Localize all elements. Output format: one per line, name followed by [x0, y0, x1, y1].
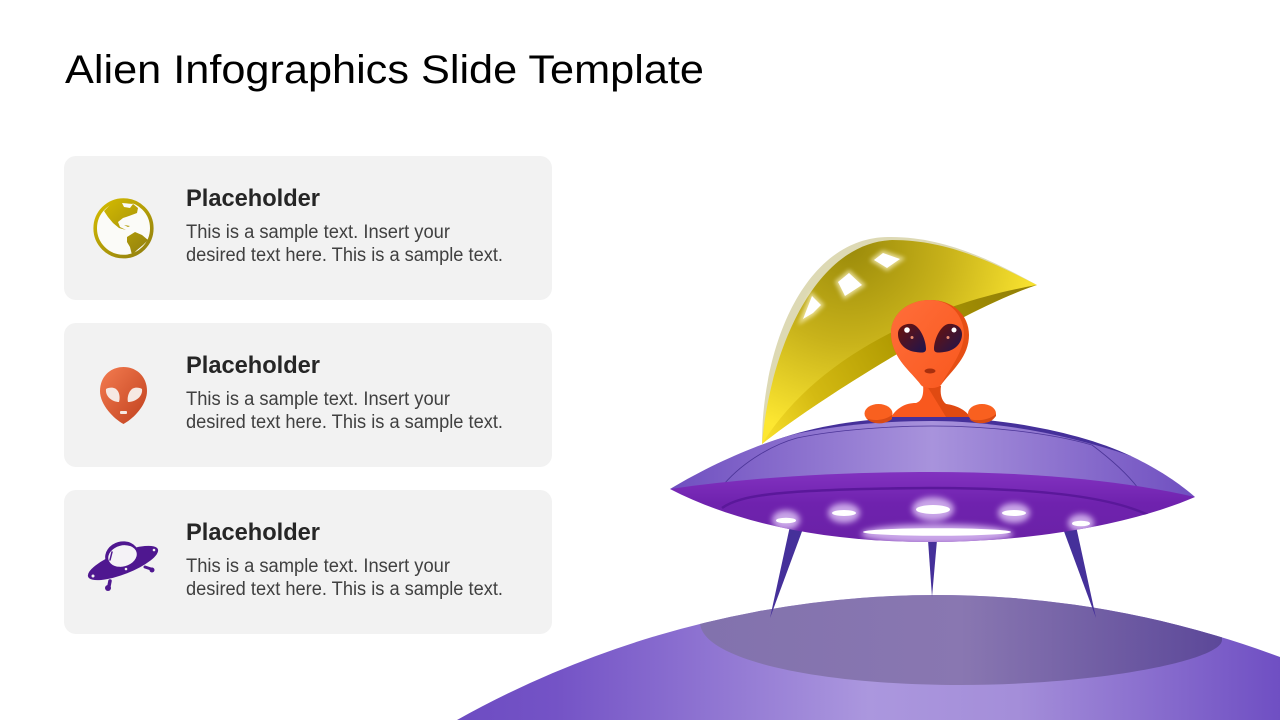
canopy windows [803, 253, 900, 319]
body text: This is a sample text. Insert your [186, 556, 451, 577]
ufo lights [772, 497, 1094, 544]
ufo shadow on planet [700, 595, 1222, 685]
panel: placeholder 3 [64, 490, 552, 634]
band groove [722, 486, 1148, 515]
ufo legs [770, 526, 1096, 618]
body text: desired text here. This is a sample text. [186, 245, 503, 266]
panel: placeholder 1 [64, 156, 552, 300]
ufo hull [670, 417, 1195, 544]
body text: This is a sample text. Insert your [186, 222, 451, 243]
body text: desired text here. This is a sample text. [186, 412, 503, 433]
panel: placeholder 2 [64, 323, 552, 467]
alien head [891, 300, 969, 388]
alien eyes [898, 324, 962, 353]
body text [186, 389, 503, 433]
title: Alien Infographics Slide Template [65, 48, 704, 92]
heading: Placeholder [186, 519, 320, 546]
icon: globe [95, 199, 152, 257]
heading: Placeholder [186, 352, 320, 379]
alien mouth [924, 368, 936, 374]
body text: This is a sample text. Insert your [186, 389, 451, 410]
body text: desired text here. This is a sample text. [186, 579, 503, 600]
ufo canopy [762, 237, 1037, 444]
icon: alien head [100, 367, 147, 424]
alien neck and shoulders [891, 384, 970, 417]
heading: Placeholder [186, 185, 320, 212]
alien [864, 300, 996, 423]
lower band [670, 472, 1195, 542]
icon: flying saucer [84, 538, 162, 591]
planet [457, 595, 1280, 720]
body text [186, 556, 503, 600]
body text [186, 222, 503, 266]
alien hands [864, 404, 996, 423]
